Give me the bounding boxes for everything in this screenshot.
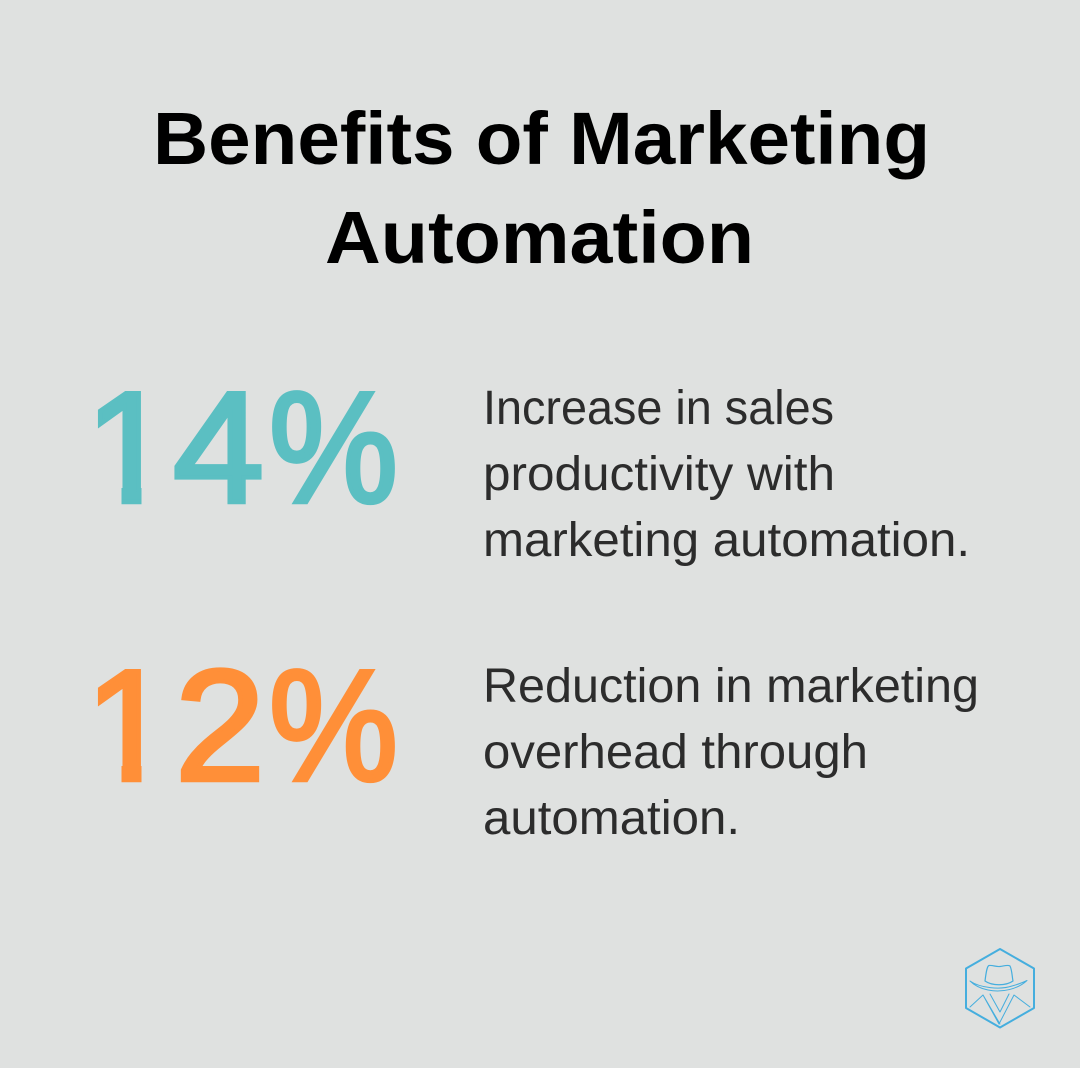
stat number: 12%: [98, 667, 395, 784]
stat number: 12%: 1: [85, 638, 173, 814]
stat description: sales productivity: productivity with: [483, 448, 835, 501]
infographic canvas: [98, 110, 1035, 1028]
stat description: sales productivity: Increase in sales: [483, 382, 834, 435]
stat: 14% sales productivity: [98, 389, 966, 566]
stat: 12% marketing overhead: [98, 667, 976, 834]
stat description: sales productivity: marketing automation.: [483, 514, 970, 567]
stat number: 12%: 2: [175, 638, 265, 814]
stat description: marketing overhead: overhead through: [483, 726, 868, 779]
title: Automation: [325, 196, 754, 279]
hat brim: [970, 980, 1027, 991]
stat description: marketing overhead: [483, 660, 979, 845]
collar and lapels: [970, 994, 1030, 1024]
hexagon outline: [966, 949, 1034, 1028]
hat: [985, 965, 1013, 985]
stat number: 14%: [98, 390, 395, 506]
stat number: 14%: 1: [85, 360, 173, 536]
stat description: marketing overhead: Reduction in marketing: [483, 660, 979, 713]
icon: hexagon logo with hat-wearing agent: [966, 949, 1034, 1028]
stat number: 14%: %: [269, 360, 398, 536]
title: Benefits of Marketing: [153, 97, 930, 180]
stat number: 14%: 4: [173, 360, 264, 536]
stat number: 12%: %: [269, 638, 398, 814]
title: [153, 97, 930, 279]
stat description: sales productivity: [483, 382, 970, 567]
stat description: marketing overhead: automation.: [483, 792, 740, 845]
